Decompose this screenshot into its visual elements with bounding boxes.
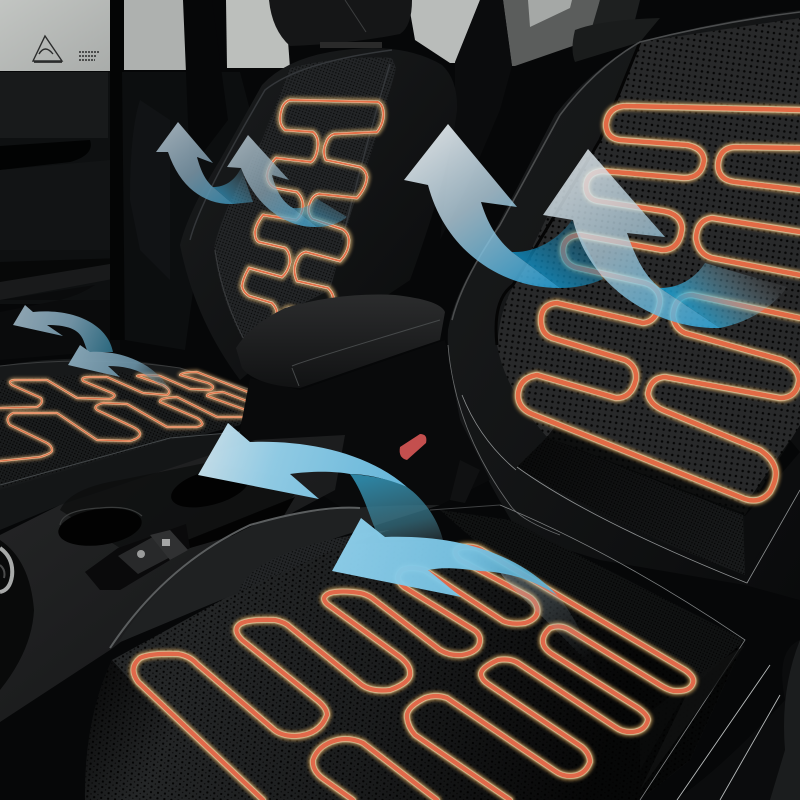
passenger headrest	[269, 0, 412, 48]
arrow: driver back left	[404, 124, 603, 288]
arrow: passenger back left	[156, 122, 253, 204]
driver cushion heater	[133, 547, 693, 800]
seat side box and seat-belt buckle	[240, 340, 490, 510]
arrow: passenger floor upper	[13, 305, 113, 352]
door panel	[0, 72, 122, 360]
driver seat back	[448, 10, 800, 600]
rear headrest	[572, 18, 660, 62]
passenger seat cushion	[0, 358, 262, 530]
center console	[0, 435, 345, 722]
pillar and seat belt	[110, 0, 250, 350]
arrow: passenger floor lower	[68, 345, 172, 393]
arrow: driver cushion	[332, 518, 600, 677]
driver seat back heater	[518, 106, 800, 500]
seat side stitching and door sill	[675, 640, 800, 800]
arrow: passenger back right	[227, 135, 347, 227]
passenger seat back heater	[242, 100, 383, 321]
console switches	[118, 530, 188, 574]
driver seat cushion	[85, 505, 745, 800]
armrest	[236, 295, 445, 388]
gear shifter	[0, 540, 34, 690]
passenger cushion heater	[0, 372, 258, 461]
arrow: driver back right	[543, 149, 787, 328]
window sticker icon	[33, 36, 99, 62]
side windows	[0, 0, 640, 240]
arrow: centre console	[198, 423, 443, 540]
passenger seat back	[180, 48, 457, 380]
